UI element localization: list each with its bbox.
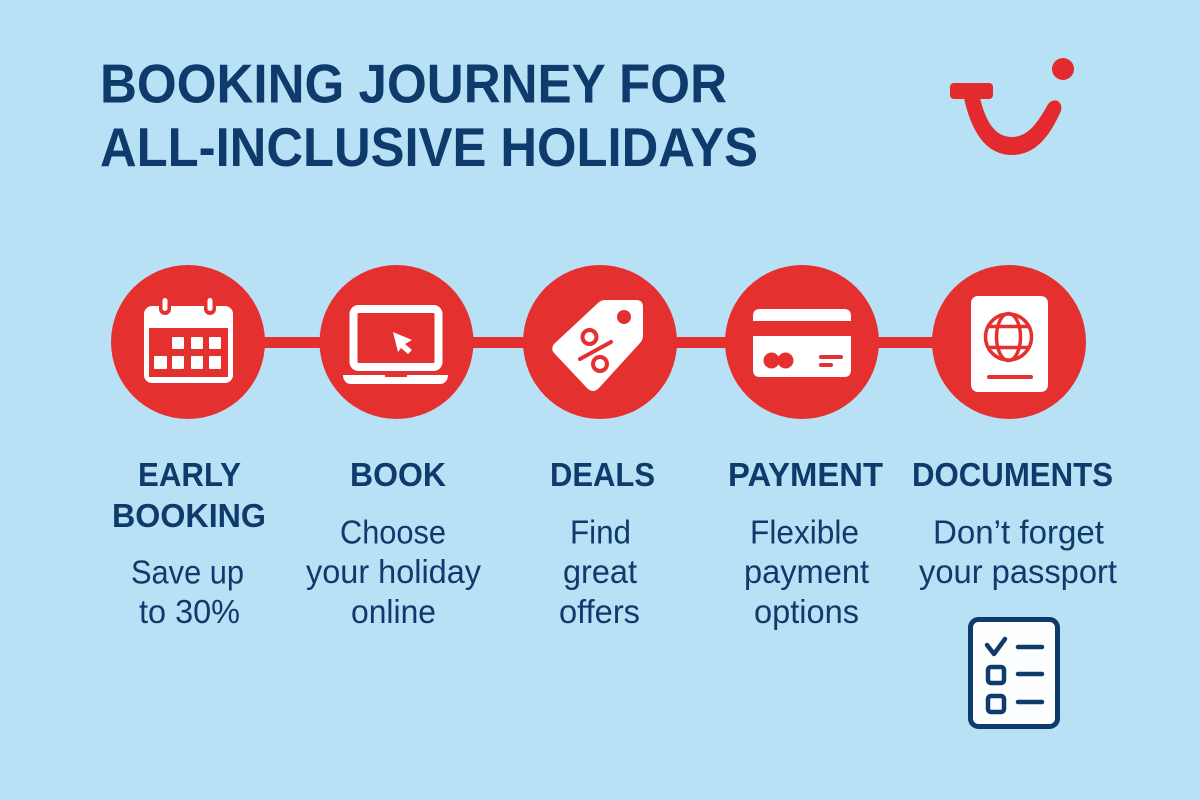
- label: deals: offers: [559, 593, 640, 630]
- label: documents: Don’t forget: [933, 514, 1104, 550]
- label: deals: [550, 456, 655, 630]
- icon: checklist: [970, 620, 1058, 726]
- label: book: Choose: [340, 514, 446, 550]
- step 5: documents icon: [932, 265, 1086, 419]
- label: documents: [912, 456, 1117, 590]
- label: payment: payment: [744, 553, 869, 590]
- label: payment: Flexible: [750, 514, 859, 550]
- label: early booking: BOOKING: [112, 497, 266, 534]
- label: early booking: EARLY: [138, 456, 241, 493]
- label: payment: PAYMENT: [728, 456, 883, 493]
- connector line: [188, 337, 1009, 348]
- title: [100, 52, 758, 178]
- label: deals: DEALS: [550, 456, 655, 493]
- label: book: [306, 456, 481, 630]
- label: payment: [728, 456, 883, 630]
- step 1: early booking icon: [111, 265, 265, 419]
- title: BOOKING JOURNEY FOR: [100, 52, 727, 114]
- step 4: payment icon: [725, 265, 879, 419]
- label: early booking: [112, 456, 266, 630]
- title: ALL-INCLUSIVE HOLIDAYS: [100, 116, 758, 178]
- label: book: your holiday: [306, 553, 481, 590]
- label: book: BOOK: [350, 456, 446, 493]
- label: early booking: to 30%: [139, 593, 240, 630]
- label: early booking: Save up: [131, 554, 244, 590]
- label: deals: Find: [570, 514, 631, 550]
- step 3: deals icon: [523, 265, 677, 419]
- label: documents: your passport: [919, 553, 1117, 590]
- label: documents: DOCUMENTS: [912, 456, 1113, 493]
- label: payment: options: [754, 593, 859, 630]
- logo: [950, 58, 1074, 155]
- label: book: online: [351, 593, 436, 630]
- label: deals: great: [563, 553, 637, 590]
- step 2: book icon: [320, 265, 474, 419]
